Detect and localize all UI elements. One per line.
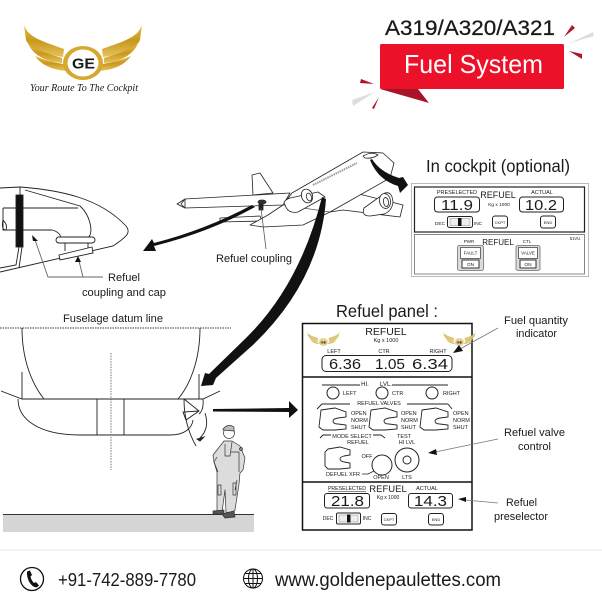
icon: phone [20,568,44,590]
cockpit upper section: REFUEL [480,190,516,200]
mode select: REFUEL [347,440,369,446]
preselector section: PRESELECTED [328,486,366,492]
panel: refuel panel [302,324,475,530]
fuel quantity section: CTR [378,349,390,355]
HI LVL lights: LEFT [343,391,357,397]
cockpit upper section: Kg x 1000 [488,202,510,208]
logo: Golden Epaulettes wings: Your Route To The Cockpit [30,83,138,94]
cockpit lower section: PWR [464,239,475,244]
cockpit upper section: CKPT [495,220,506,225]
label: refuel coupling and cap: Refuel [108,272,140,284]
HI LVL lights: RIGHT [443,391,461,397]
arrow: aircraft to cockpit panel [370,159,408,193]
fuel quantity section: REFUEL [365,326,407,338]
cockpit lower section: 51VU [570,236,580,241]
cockpit lower section: REFUEL [482,238,514,247]
refuel valves: REFUEL VALVES [357,401,401,407]
mode select [320,434,392,481]
illustration: ground [3,514,254,532]
refuel valves: NORM [453,418,470,424]
banner: Fuel System: Fuel System [404,49,543,79]
contact: website: www.goldenepaulettes.com [274,570,501,591]
preselector section: END [432,517,440,522]
callout: fuel quantity indicator: indicator [516,328,557,340]
preselector section: CKPT [384,517,395,522]
callout: refuel preselector [458,497,548,523]
callout: refuel valve control: control [518,441,551,453]
cockpit upper section: 11.9 [441,198,473,214]
preselector section: 14.3 [414,494,447,510]
fuel quantity section: LEFT [327,349,341,355]
arrow: coupling to wing detail [143,205,255,251]
fuel quantity section: RIGHT [429,349,447,355]
refuel valves: OPEN [351,411,367,417]
refuel valves: NORM [351,418,368,424]
mode select: MODE SELECT [332,434,372,440]
small logo left: GE [320,340,327,345]
refuel valves: SHUT [351,425,367,431]
preselector section: REFUEL [369,484,407,495]
heading: In cockpit: In cockpit (optional) [426,156,570,176]
refuel valves: OPEN [401,411,417,417]
illustration: technician [213,425,245,518]
label: refuel coupling: Refuel coupling [216,253,292,265]
mode select: DEFUEL XFR [326,472,360,478]
logo: Golden Epaulettes wings: GE [72,56,95,72]
refuel valves: NORM [401,418,418,424]
cockpit lower section: FAULT [464,250,478,256]
icon: globe [244,569,262,588]
cockpit upper section: INC [474,221,483,227]
test lights: TEST [397,434,412,440]
fuel quantity section [322,326,452,373]
cockpit lower section [414,234,584,274]
arrow: aircraft to refuel panel [201,197,326,386]
HI LVL lights: CTR [392,391,403,397]
test lights: LTS [402,475,412,481]
cockpit lower section: VALVE [521,250,535,256]
cockpit upper section: END [544,220,552,225]
small logo left [307,332,339,346]
illustration: A320 aircraft [177,152,403,265]
cockpit lower section: ON [524,262,532,268]
preselector section [323,484,452,525]
arrow: fuselage to refuel panel [213,401,298,418]
test lights: HI LVL [399,440,415,446]
cockpit upper section: PRESELECTED [437,190,477,196]
fuel quantity section: 6.34 [412,357,448,373]
contact: phone number: +91-742-889-7780 [58,570,196,590]
title: aircraft family: A319/A320/A321 [385,17,555,40]
callout: refuel valve control [428,427,565,455]
banner: Fuel System [352,25,594,109]
refuel valves: SHUT [453,425,469,431]
cockpit upper section [414,187,584,232]
fuel quantity section: 1.05 [375,357,405,373]
cockpit upper section: 10.2 [525,198,557,214]
label: refuel coupling and cap [82,272,166,299]
fuel quantity section: Kg x 1000 [374,338,398,344]
cockpit lower section: ON [467,262,475,268]
refuel valves: SHUT [401,425,417,431]
preselector section: INC [363,516,372,522]
panel: cockpit refuel panel [412,184,588,276]
preselector section: DEC [323,516,334,522]
callout: refuel valve control: Refuel valve [504,427,565,439]
callout: fuel quantity indicator [453,315,569,353]
test lights [395,434,419,481]
mode select: OPEN [373,475,389,481]
cockpit upper section: ACTUAL [531,190,553,196]
callout: refuel preselector: Refuel [506,497,537,509]
illustration: wing refuel coupling detail [0,187,128,277]
callout: refuel preselector: preselector [494,511,548,523]
refuel valves [317,400,470,431]
preselector section: ACTUAL [416,486,438,492]
mode select: OFF [362,454,373,460]
small logo right: GE [456,340,463,345]
callout: fuel quantity indicator: Fuel quantity [504,315,569,327]
heading: Refuel panel: Refuel panel : [336,301,438,321]
logo: Golden Epaulettes wings [24,25,142,94]
HI LVL lights: HI. [361,382,369,388]
cockpit lower section: CTL [523,239,532,244]
fuel quantity section: 6.36 [329,357,361,373]
HI LVL lights: LVL. [380,382,392,388]
preselector section: 21.8 [331,494,364,510]
refuel valves: OPEN [453,411,469,417]
cockpit upper section: DEC [435,221,446,227]
illustration: fuselage cross-section [0,328,231,470]
label: fuselage datum line: Fuselage datum line [63,313,163,325]
small logo right [443,332,475,346]
label: refuel coupling and cap: coupling and cap [82,287,166,299]
preselector section: Kg x 1000 [377,495,399,501]
HI LVL lights [322,381,461,399]
